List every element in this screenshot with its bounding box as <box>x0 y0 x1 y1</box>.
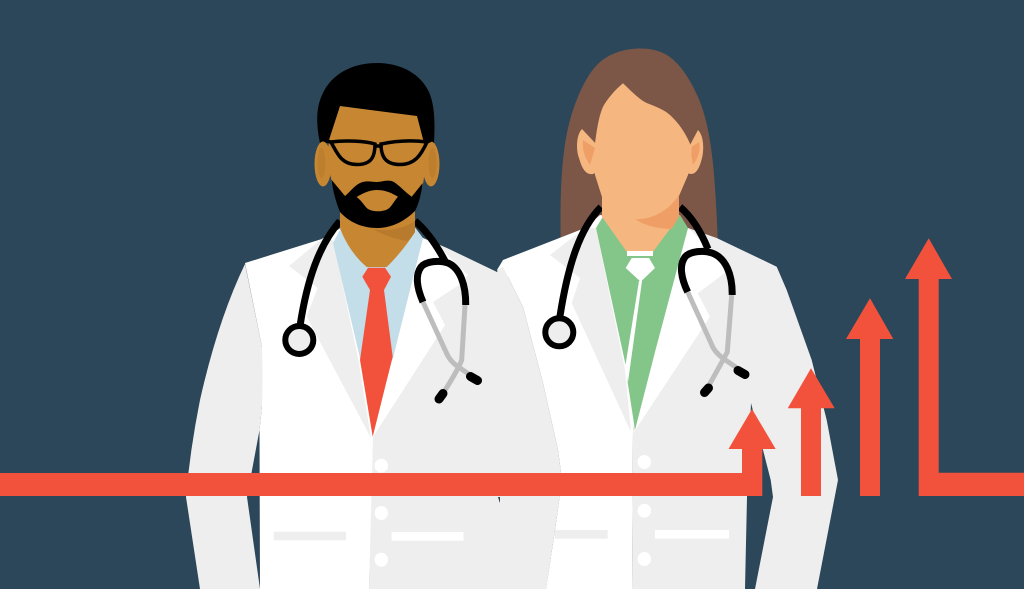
male ears <box>314 142 440 186</box>
female neck shadow <box>635 195 679 229</box>
male stethoscope chest piece <box>285 326 313 354</box>
female shirt <box>596 215 688 430</box>
arrow 2 <box>788 368 835 496</box>
male coat buttons <box>375 459 388 567</box>
female stethoscope tubes <box>560 207 708 316</box>
male coat pockets <box>274 532 464 541</box>
female stethoscope chest piece <box>545 318 573 346</box>
female coat pockets <box>555 530 729 539</box>
arrow 3 <box>846 298 893 496</box>
female doctor <box>497 48 838 589</box>
male neck <box>340 205 415 267</box>
female stethoscope earpieces <box>681 251 745 392</box>
female shirt placket line <box>625 281 642 382</box>
male stethoscope tubes <box>300 221 445 326</box>
female neck and face <box>595 83 692 252</box>
female coat <box>497 215 838 589</box>
male shirt <box>333 226 423 400</box>
male glasses <box>326 140 431 164</box>
female hair <box>560 48 718 240</box>
rising arrows <box>0 238 1024 496</box>
male stethoscope earpieces <box>417 261 478 399</box>
male face <box>327 106 426 212</box>
male coat <box>186 225 562 589</box>
male tie <box>360 268 393 437</box>
male neck shadow <box>373 221 415 241</box>
male doctor <box>186 63 562 589</box>
female ears <box>577 129 703 174</box>
arrow 4 with horizontal line to right edge <box>905 238 1024 496</box>
arrow 1 with long horizontal line <box>0 409 776 496</box>
female coat buttons <box>638 455 651 566</box>
female collar and tie knot <box>626 251 655 282</box>
male hair <box>317 63 434 143</box>
male beard <box>332 180 423 228</box>
